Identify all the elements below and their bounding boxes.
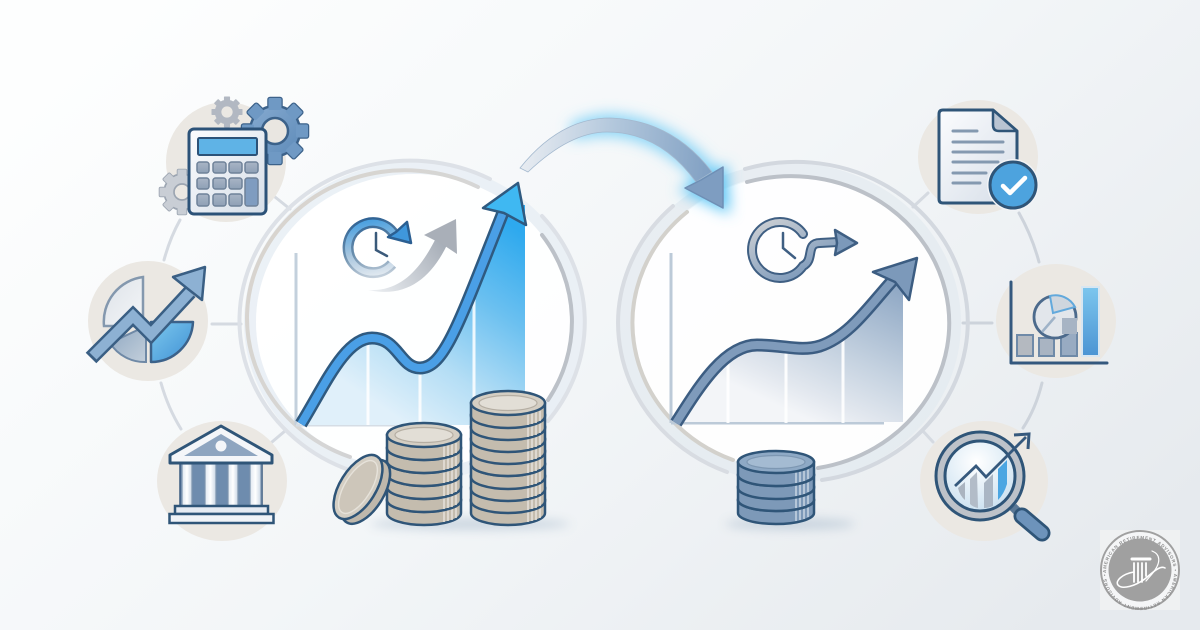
right growth line with arrow [676,258,917,423]
columns backing [180,463,262,507]
calculator body [189,129,266,214]
bar chart backdrop [996,264,1116,378]
small top gear [211,96,243,128]
logo column mark [1117,551,1165,587]
pediment [170,426,272,463]
right outer and inner rings [618,162,968,480]
icon: bar chart with pie [996,264,1116,378]
calculator backdrop [166,102,286,222]
curved transition arrow [520,114,730,214]
pie blue wedge [151,322,193,362]
panel: left high-growth circle [239,161,585,532]
icon: left clock with arrows [348,219,457,292]
right ring shading [625,169,955,477]
pie top-left wedge [104,277,143,326]
calculator screen [198,138,257,155]
bars [1017,287,1099,356]
pie bottom-left wedge [110,326,146,362]
pie backdrop [88,261,208,381]
right chart area with columns [684,286,903,423]
right circle interior [632,176,948,470]
grey left gear [160,170,204,214]
left chart axes [296,253,420,425]
logo inner disc [1108,538,1172,602]
coin stack medium [387,423,461,525]
arrow head [685,167,723,208]
left growth line with arrow [301,183,526,424]
arrow band [520,118,712,182]
icon: calculator with gears [160,96,308,222]
columns [182,464,261,506]
magnifier lens [936,432,1024,520]
icon: pie chart with rising arrow [88,261,208,381]
connectors between icons and circles [161,193,1042,442]
zigzag arrow [91,267,205,358]
bar chart axes [1011,282,1107,363]
logo tile [1100,530,1180,610]
small coin shadow [725,518,855,530]
document backdrop [918,100,1038,214]
small coin stack [738,451,814,524]
bank backdrop [157,421,287,541]
calculator buttons [197,162,258,206]
lens bars [958,460,1007,508]
page fold [993,110,1017,131]
circle interior [256,174,572,470]
icon: classical bank building [157,421,287,541]
document text lines [953,131,1003,183]
bank base [175,506,268,514]
coin shadow [370,518,570,530]
magnifier backdrop [920,421,1048,541]
icon: document with check mark [918,100,1039,214]
document page [939,110,1017,203]
coin stack tall [471,391,545,525]
left chart area with columns [296,200,528,425]
panel: right low-growth circle [618,162,968,530]
left ring shading [250,168,578,476]
logo: American Retirement Advisors seal [1100,530,1180,610]
left outer and inner rings [239,161,585,471]
magnifier handle [1013,507,1022,516]
arrow glow [570,114,730,214]
check badge [987,159,1039,211]
logo outer ring [1101,531,1179,609]
leaning coin [324,447,400,532]
logo ring text: AMERICAN RETIREMENT ADVISORS • AMERICAN RETIREMENT ADVISORS • [1103,536,1177,610]
lens trend arrow [955,437,1026,486]
small pie [1034,295,1077,338]
icon: magnifier over chart [920,421,1048,541]
blue gear [242,98,308,164]
icon: right clock with arrow [752,222,857,278]
right chart axes [671,253,884,423]
